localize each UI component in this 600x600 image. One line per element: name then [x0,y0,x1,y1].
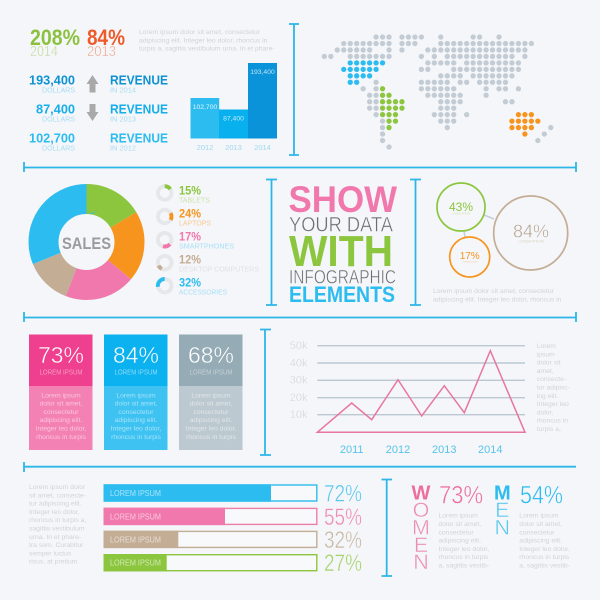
legend item: accessories: ACCESSORIES [179,288,227,296]
legend: sales categories [158,184,259,296]
text block: progress note: sagittis vestibulum [29,526,85,532]
progress bar 72%: LOREM IPSUM [110,489,161,498]
panel: 73% card [29,334,92,450]
stat: 208% 2014: 2014 [30,43,58,60]
panel: 73% card: 73% [38,342,84,368]
chart: line chart 2011-2014: 30k [290,375,308,387]
panel: women: dolor sit amet, [438,521,481,528]
legend item: tablets [158,184,210,204]
title: ELEMENTS [289,282,395,307]
title: INFOGRAPHIC [289,268,396,288]
panel: men: Lorem ipsum [519,513,559,520]
panel: women: O [413,498,429,522]
panel: 73% card: Integer leo dolor, [36,426,86,432]
chart: dotted world map [324,37,551,147]
text block: line chart note: Integer leo [537,401,569,408]
legend item: laptops: 24% [179,206,201,220]
panel: men: Integer leo dolor, [519,546,570,553]
revenue row 2013 [36,102,168,124]
text block: line chart note: rhoncus in [537,418,568,425]
progress bar 55% [104,504,362,531]
text block: progress note: semper luctus [29,550,72,557]
chart: line chart 2011-2014: 20k [290,392,308,404]
text block: progress note: risus, at pretium [29,559,78,566]
bar chart: revenue by year: 2014 [254,143,271,152]
panel: women: E [414,533,428,557]
revenue row 2014: IN 2014 [110,86,136,94]
revenue row 2012: IN 2012 [110,144,136,152]
revenue row 2014: REVENUE [110,72,168,88]
panel: 68% card: 68% [188,342,234,368]
text block: progress note: sit amet, consecte- [29,492,86,499]
stat: 208% 2014 [30,25,80,60]
chart: line chart 2011-2014: 2013 [432,444,457,456]
panel: men: consectetur [519,529,555,536]
bar chart: revenue by year: 193,400 [250,69,275,76]
divider bracket: middle [24,312,576,322]
panel: women: N [413,550,429,574]
revenue row 2013: REVENUE [110,102,168,116]
bubble: 84% [494,196,568,270]
text block: progress note: Lorem ipsum dolor [29,484,86,491]
bubble: 17%: LOREM IPSUM [462,262,478,264]
revenue row 2014: DOLLARS [42,86,75,94]
panel: 68% card: Lorem ipsum [191,392,231,399]
revenue row 2013: 87,400 [36,102,75,116]
title: WITH [289,227,393,276]
icon: up arrow [86,75,98,92]
panel: men: a, sagittis vestib- [519,562,570,570]
legend item: tablets: TABLETS [179,196,210,204]
revenue row 2012 [29,130,168,152]
revenue row 2012: REVENUE [110,130,168,146]
bubble: 84%: 84% [513,222,549,242]
revenue row 2013: DOLLARS [42,114,75,124]
stat: 84% 2013: 2013 [87,43,116,60]
text block: line chart note: ipsum [537,351,555,358]
text block: line chart note: turpis a, [537,426,561,433]
stat: 208% 2014: 208% [30,25,80,50]
bubble: 17%: 17% [460,251,480,262]
panel: 68% card: Integer leo dolor, [186,426,236,432]
progress bar 27%: LOREM IPSUM [110,559,161,568]
bubble: 43%: 43% [449,200,473,214]
chart: line chart 2011-2014 [290,340,525,456]
bar chart: revenue by year [190,63,277,152]
panel: 84% card: rhoncus in turpis [111,434,162,441]
revenue row 2012: DOLLARS [42,144,75,152]
progress bar 72%: 72% [324,480,362,508]
chart: line chart 2011-2014: 10k [290,409,308,421]
text block: intro: turpis a, sagittis vestibulum urna. In et phare- [139,46,275,53]
bar chart: revenue by year: 87,400 [223,116,244,122]
bracket: title right [410,180,421,305]
text block: bubbles caption: Lorem ipsum dolor sit amet, consectetur [433,288,555,295]
text block: progress note: Integer leo dolor, [29,509,80,516]
panel: 68% card: rhoncus in turpis [186,434,237,441]
text block: intro: Lorem ipsum dolor sit amet, consectetur [139,29,261,36]
panel: men: dolor sit amet, [519,521,562,528]
panel: men: N [495,516,510,540]
bar chart: revenue by year: 2012 [197,143,213,152]
text block: progress note: urna. In et phare- [29,534,81,541]
panel: men [494,481,570,570]
panel: 73% card: Lorem ipsum [41,392,81,399]
chart: line chart 2011-2014: 2014 [478,444,503,456]
panel: men: adipiscing elit. [519,538,562,545]
progress bar 55%: LOREM IPSUM [110,512,161,521]
panel: women: M [412,516,430,540]
text block: line chart note: ing elit. [537,393,558,400]
chart: line chart 2011-2014: 2012 [386,444,410,456]
bubble: 43%: LOREM IPSUM [452,212,470,216]
panel: 68% card: consectetur [193,409,229,416]
panel: 73% card: LOREM IPSUM [40,370,83,376]
panel: yearly growth [30,25,275,60]
panel: women: 73% [439,481,483,509]
bracket: line chart [260,330,271,455]
panel: 68% card: adipiscing elit. [190,417,232,424]
panel: women [412,481,489,574]
stat: 84% 2013: 84% [87,25,125,50]
bar chart: revenue by year: 102,700 [193,104,217,111]
legend item: smartphones [158,230,234,250]
progress bar 72% [104,480,362,508]
stat: 84% 2013 [87,25,125,60]
text block: progress note: tra sem. Curabitur [29,542,84,549]
panel: revenue list [29,72,168,152]
text block: line chart note: Lorem [537,343,556,350]
panel: 84% card: LOREM IPSUM [114,370,158,376]
panel: men: 54% [520,481,563,509]
panel: women: rhoncus in turpis [438,554,489,561]
legend item: accessories [158,276,227,296]
progress bar 32%: 32% [324,527,362,554]
panel: 68% card: dolor sit amet, [190,401,232,408]
title: SHOW [288,179,397,220]
legend item: desktop computers: DESKTOP COMPUTERS [179,264,259,274]
text block: progress note: rhoncus in turpis a, [29,517,87,524]
panel: 84% card: adipiscing elit. [115,417,157,424]
revenue row 2013: IN 2013 [110,114,136,124]
panel: 84% card [104,334,168,450]
panel: women: adipiscing elit. [438,538,481,545]
text block: intro: adipiscing elit. Integer leo dolor, rhoncus in [139,37,268,44]
legend item: smartphones: SMARTPHONES [179,242,234,250]
panel: women: W [412,482,431,504]
bracket: gender section [382,480,392,576]
bubble: 17% [450,237,490,277]
legend item: laptops [158,206,211,228]
panel: 68% card: LOREM IPSUM [190,370,233,376]
legend item: smartphones: 17% [179,230,201,244]
chart: linked bubbles [437,183,568,277]
bracket: top section [289,24,299,155]
panel: 84% card: Lorem ipsum [116,392,156,399]
panel: men: M [494,482,511,504]
text block: line chart note: consecte- [537,376,566,383]
chart: line chart 2011-2014: 2011 [340,444,364,456]
bubble: 43% [437,183,485,231]
revenue row 2014 [29,72,168,94]
legend item: laptops: LAPTOPS [179,218,211,228]
text block: line chart note: dolor, [537,409,553,416]
progress bar 32% [104,527,362,554]
panel: men: rhoncus in turpis [519,554,570,561]
text block: line chart note: tur adipisc- [537,384,570,392]
progress bar 32%: LOREM IPSUM [110,535,161,544]
panel: men: E [495,498,509,522]
panel: women: a, sagittis vestib- [438,562,489,570]
panel: 73% card: rhoncus in turpis [36,434,87,441]
panel: women: Integer leo dolor, [438,546,489,553]
text block: line chart note: amet, [537,368,554,375]
progress bar 55%: 55% [324,504,362,531]
chart: sales donut: SALES [62,234,111,253]
panel: 84% card: dolor sit amet, [115,401,157,408]
title [288,179,397,307]
icon: down arrow [86,104,98,121]
panel: 73% card: adipiscing elit. [40,417,82,424]
text block: progress note: tur adipiscing elit. [29,501,82,508]
legend item: desktop computers: 12% [179,252,201,266]
text block: line chart note: dolor sit [537,360,561,367]
divider bracket: top [24,162,576,172]
chart: line chart 2011-2014: 40k [290,357,308,369]
panel: women: consectetur [438,529,474,536]
chart: line chart 2011-2014: 50k [290,340,308,352]
panel: 84% card: consectetur [118,409,154,416]
panel: 68% card [179,334,242,450]
panel: 73% card: dolor sit amet, [40,401,82,408]
progress bar 27%: 27% [324,550,362,577]
panel: 84% card: Integer leo dolor, [111,426,161,432]
divider bracket: bottom [24,462,576,472]
bubble: 84%: LOREM IPSUM [518,240,544,244]
legend item: accessories: 32% [179,276,201,290]
legend item: tablets: 15% [179,184,201,198]
bar chart: revenue by year: 2013 [225,143,242,152]
chart: progress bars [104,480,362,577]
revenue row 2012: 102,700 [29,130,75,146]
chart: sales donut [44,199,130,285]
text block: bubbles caption: adipiscing elit. Integer leo dolor, rhoncus in [433,296,562,304]
panel: 73% card: consectetur [43,409,79,416]
title: YOUR DATA [289,214,393,237]
revenue row 2014: 193,400 [29,72,75,88]
panel: women: Lorem ipsum [438,513,478,520]
progress bar 27% [104,550,362,577]
bracket: title left [266,180,277,305]
legend item: desktop computers [158,252,259,274]
panel: 84% card: 84% [113,342,159,368]
